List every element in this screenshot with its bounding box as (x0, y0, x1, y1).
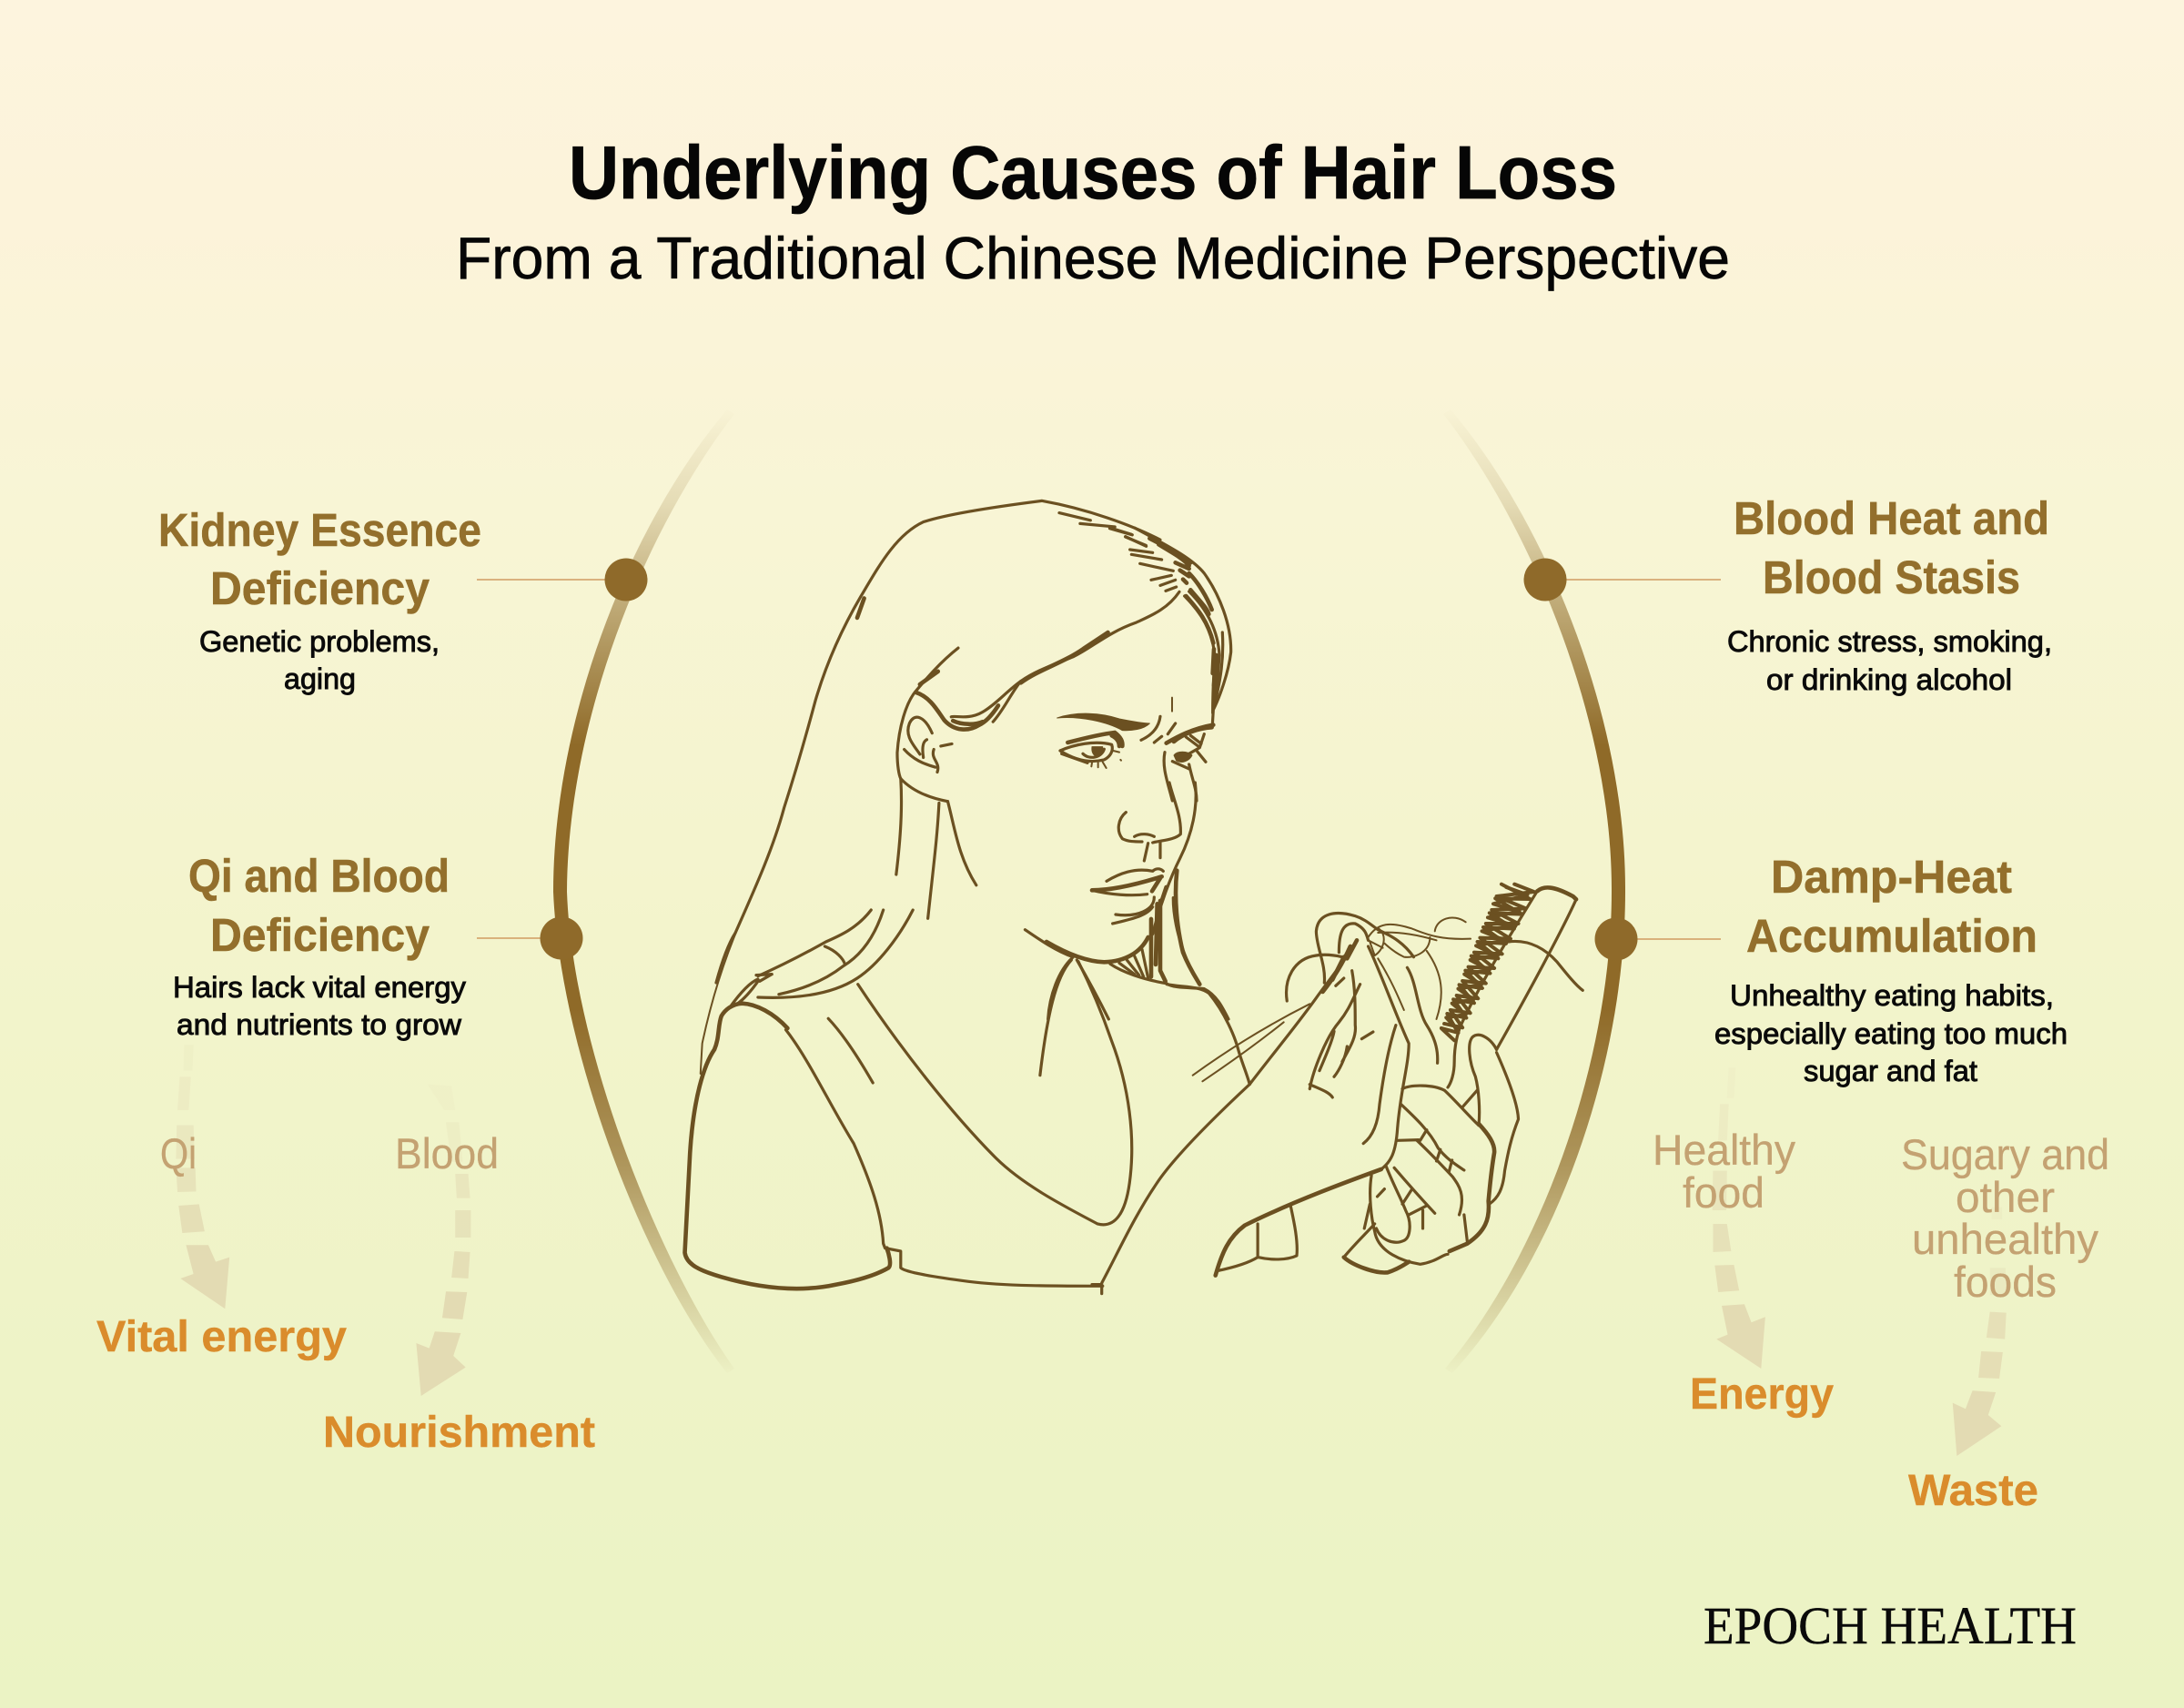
label: Qi: Qi (160, 1129, 197, 1177)
label: Nourishment: Nourishment (323, 1409, 595, 1457)
panel: kidney essence deficiency (158, 504, 648, 695)
panel: damp-heat accumulation: sugar and fat (1804, 1055, 1977, 1087)
panel: qi and blood deficiency: Deficiency (210, 909, 430, 961)
panel: damp-heat accumulation: Damp-Heat (1771, 851, 2012, 903)
panel: damp-heat accumulation (1594, 851, 2068, 1087)
title: Underlying Causes of Hair Loss (569, 130, 1617, 215)
panel: kidney essence deficiency: aging (284, 662, 356, 695)
panel: blood heat and blood stasis: Chronic stress, smoking, (1727, 625, 2052, 658)
label: Sugary and other unhealthy foods: unhealthy (1912, 1215, 2098, 1263)
label: Blood: Blood (395, 1129, 499, 1177)
label: Sugary and other unhealthy foods: foods (1954, 1258, 2057, 1306)
arrow: healthy food to energy (1713, 1067, 1765, 1369)
panel: qi and blood deficiency (173, 850, 582, 1041)
panel: damp-heat accumulation: Accumulation (1746, 910, 2037, 962)
logo: Epoch Health: EPOCH HEALTH (1704, 1596, 2077, 1655)
label: Sugary and other unhealthy foods: Sugary and (1901, 1130, 2109, 1178)
panel: blood heat and blood stasis (1523, 492, 2052, 696)
panel: kidney essence deficiency: Genetic problems, (199, 625, 440, 658)
panel: qi and blood deficiency: Qi and Blood (188, 850, 450, 902)
panel: blood heat and blood stasis: Blood Heat and (1734, 492, 2049, 544)
arrow: blood to nourishment (416, 1085, 470, 1396)
label: Energy: Energy (1690, 1370, 1834, 1419)
left arc (553, 409, 734, 1373)
label: Healthy food: Healthy (1653, 1126, 1795, 1174)
panel: kidney essence deficiency: Kidney Essence (158, 504, 481, 556)
panel: damp-heat accumulation: especially eating too much (1714, 1017, 2068, 1050)
arrow: qi to vital energy (176, 1045, 229, 1309)
panel: kidney essence deficiency: Deficiency (210, 562, 430, 614)
right arc (1443, 409, 1625, 1373)
illustration: woman holding comb and fallen hair (685, 500, 1582, 1294)
label: Waste: Waste (1908, 1467, 2038, 1515)
label: Healthy food (1653, 1126, 1795, 1217)
label: Sugary and other unhealthy foods: other (1956, 1173, 2055, 1221)
label: Vital energy: Vital energy (96, 1313, 347, 1361)
panel: qi and blood deficiency: and nutrients to grow (177, 1008, 462, 1041)
panel: qi and blood deficiency: Hairs lack vital energy (173, 971, 466, 1004)
panel: damp-heat accumulation: Unhealthy eating habits, (1730, 979, 2054, 1012)
panel: blood heat and blood stasis: or drinking alcohol (1766, 663, 2012, 696)
panel: blood heat and blood stasis: Blood Stasis (1763, 551, 2020, 603)
arrow: sugary foods to waste (1953, 1208, 2007, 1456)
label: Sugary and other unhealthy foods (1901, 1130, 2109, 1306)
subtitle: From a Traditional Chinese Medicine Perspective (456, 225, 1730, 291)
label: Healthy food: food (1683, 1168, 1764, 1217)
